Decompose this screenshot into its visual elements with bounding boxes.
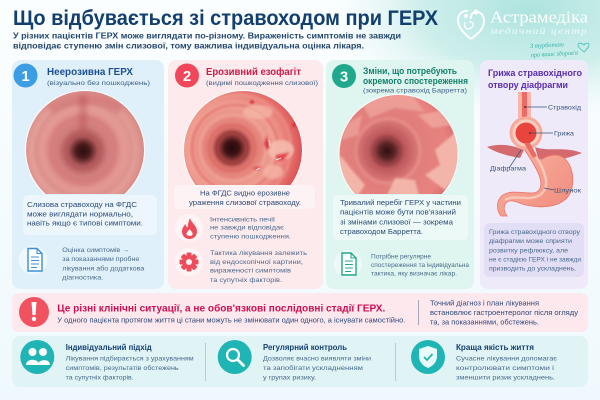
subheading: (візуально без пошкоджень) [47, 79, 150, 87]
panel: benefits band [12, 336, 588, 387]
labels: Стравохід [548, 104, 581, 112]
benefit: regular monitoring [218, 340, 371, 382]
note: treatment: від ендоскопічної картини, [210, 258, 303, 266]
logo subtitle: медичний центр [489, 26, 588, 37]
heading [363, 66, 468, 86]
icon: exclamation [19, 297, 49, 327]
text card: навіть якщо є типові симптоми. [27, 219, 143, 228]
heading: Ерозивний езофагіт [206, 66, 301, 78]
diagnosis note: та, за показаннями, обстежень. [430, 318, 539, 327]
heading: Неерозивна ГЕРХ [47, 67, 133, 78]
text [263, 355, 371, 382]
heading: Грижа стравохідного [488, 68, 583, 78]
icon: logo heart [458, 10, 484, 39]
text [66, 355, 194, 382]
note: heartburn: Інтенсивність печії [210, 216, 275, 224]
diagnosis note: встановлює гастроентеролог після огляду [430, 308, 578, 317]
heading: отвору діафрагми [488, 80, 568, 90]
note: спостереження та індивідуальна [371, 261, 469, 269]
endoscopy image 2 [183, 90, 303, 185]
labels: Грижа [554, 130, 574, 138]
icon: flame [175, 214, 203, 242]
number 1: 1 [21, 68, 30, 85]
intro text [13, 32, 401, 50]
note: діагностика. [62, 274, 103, 282]
callout: warning band [12, 293, 588, 332]
callout text: У одного пацієнта протягом життя ці стани можуть не змінювати один одного, а існувати самостійно. [57, 317, 405, 325]
stomach [497, 145, 573, 216]
note: Оцінка симптомів → [62, 246, 129, 254]
logo slogan [530, 41, 578, 59]
text: контролювати симптоми і [456, 364, 555, 372]
callout heading: Це різні клінічні ситуації, а не обов'язкові послідовні стадії ГЕРХ. [57, 302, 385, 314]
logo slogan: про ваше здоров'я [531, 50, 578, 59]
text card: призводить до ускладнень. [489, 266, 576, 273]
text card: стравоходом Барретта. [340, 227, 423, 236]
note: treatment: та супутніх факторів. [210, 276, 282, 284]
title: Що відбувається зі стравоходом при ГЕРХ [13, 7, 438, 30]
heading [488, 68, 583, 90]
note: heartburn: ступеню пошкодження. [210, 233, 291, 240]
note [371, 252, 469, 278]
text card: Тривалий перебіг ГЕРХ у частини [340, 198, 461, 207]
panel: changes requiring monitoring [326, 60, 474, 289]
number 3: 3 [340, 68, 348, 86]
logo [458, 8, 589, 59]
text card: не є стадією ГЕРХ і не завжди [489, 255, 581, 263]
subheading: (зокрема стравохід Барретта) [363, 86, 467, 94]
labels: Діафрагма [490, 164, 526, 172]
number 2 [175, 64, 199, 88]
label lines [509, 107, 554, 190]
diagnosis note: Точний діагноз і план лікування [430, 299, 539, 308]
heading: Регулярний контроль [263, 343, 347, 352]
icon: slogan heart [578, 43, 589, 52]
text card: ураження слизової стравоходу. [189, 198, 301, 207]
text: зменшити ризик ускладнень. [456, 375, 555, 382]
note: treatment: вираженості симптомів [210, 267, 291, 275]
text: Сучасне лікування допомагає [456, 355, 558, 363]
subheading: (видимі пошкодження слизової) [206, 79, 318, 87]
endoscopy image 1 [25, 90, 145, 194]
endoscopy image 3 [338, 94, 458, 194]
logo name: Астрамедіка [490, 8, 588, 26]
heading: Краща якість життя [456, 343, 534, 352]
number 2: 2 [183, 68, 191, 85]
panel: hiatal hernia [480, 60, 588, 289]
text card: розвитку рефлюксу, але [489, 247, 568, 254]
note: лікування або додаткова [62, 264, 145, 272]
text card: може виглядати нормально, [27, 209, 133, 218]
panel: non-erosive GERD [12, 60, 164, 289]
number 1 [14, 64, 38, 88]
text card: діафрагми може сприяти [489, 237, 572, 245]
text card: На ФГДС видно ерозивне [200, 189, 290, 198]
text: та супутніх факторів. [66, 374, 134, 382]
panel: erosive esophagitis [168, 60, 323, 289]
text: симптомів, результатів обстежень [66, 364, 179, 372]
heading: Зміни, що потребують [363, 66, 458, 76]
intro text: У різних пацієнтів ГЕРХ може виглядати по-різному. Вираженість симптомів не завжди [13, 32, 401, 40]
logo slogan: З турботою [530, 41, 564, 50]
text card: зі змінами слизової — зокрема [340, 217, 453, 226]
number 3 [332, 64, 356, 88]
text card [23, 195, 157, 235]
diagnosis note [430, 299, 578, 327]
text card [333, 195, 468, 240]
text: та запобігати ускладненням [263, 364, 363, 372]
icon: gear [175, 248, 203, 276]
labels [490, 104, 581, 194]
text card [484, 223, 584, 277]
note: за показаннями пробне [62, 255, 140, 263]
text: у групах ризику. [263, 375, 316, 382]
text: Дозволяє вчасно виявляти зміни [263, 355, 371, 363]
intro text: відповідає ступеню змін слизової, тому важлива індивідуальна оцінка лікаря. [13, 42, 364, 50]
text card: пацієнтів може бути пов'язаний [340, 207, 456, 216]
text [456, 355, 558, 382]
heading: окремого спостереження [363, 76, 468, 86]
note: treatment: Тактика лікування залежить [210, 249, 307, 257]
icon: magnifier [218, 340, 252, 374]
note: heartburn [210, 216, 291, 240]
labels: Шлунок [554, 188, 581, 194]
note: Потрібне регулярне [371, 252, 431, 260]
text card [174, 185, 315, 209]
note: тактика, яку визначає лікар. [371, 270, 457, 278]
text card: Грижа стравохідного отвору [489, 228, 581, 236]
note [62, 246, 145, 282]
hernia diagram [487, 92, 582, 216]
note: heartburn: не завжди відповідає [210, 224, 285, 232]
icon: people [20, 340, 54, 374]
note: treatment [210, 249, 307, 284]
icon: document [18, 246, 48, 274]
diaphragm [487, 145, 582, 160]
text card: Слизова стравоходу на ФГДС [27, 200, 137, 209]
esophagus [510, 92, 542, 158]
icon: shield [411, 340, 445, 374]
icon: document [334, 250, 362, 278]
text: Лікування підбирається з урахуванням [66, 355, 194, 363]
heading: Індивідуальний підхід [66, 343, 152, 352]
benefit: individual approach [20, 340, 194, 382]
benefit: quality of life [411, 340, 558, 382]
